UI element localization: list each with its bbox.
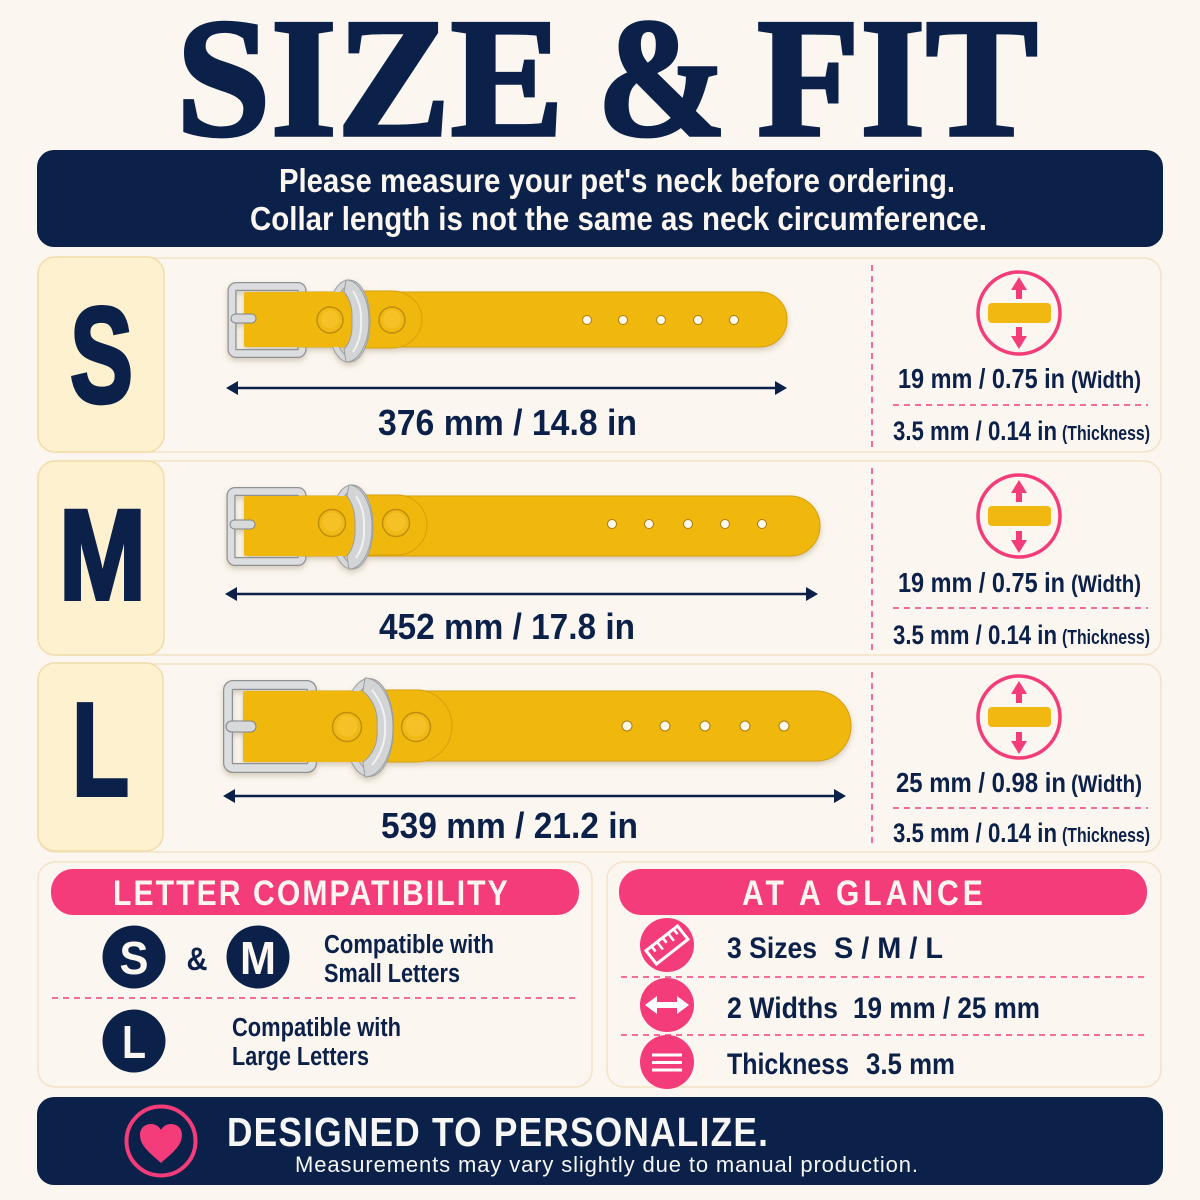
size tab S bbox=[38, 257, 164, 452]
intro banner bbox=[37, 150, 1163, 247]
collar M bbox=[230, 485, 820, 569]
icon: heart bbox=[126, 1106, 196, 1176]
width L: (Width) bbox=[1071, 771, 1142, 798]
intro banner: Collar length is not the same as neck circumference. bbox=[250, 200, 987, 237]
sizes row bbox=[727, 932, 943, 965]
letter compatibility heading: LETTER COMPATIBILITY bbox=[113, 873, 508, 913]
thickness S: 3.5 mm / 0.14 in bbox=[893, 416, 1057, 446]
collar S bbox=[231, 280, 787, 362]
thickness M: 3.5 mm / 0.14 in bbox=[893, 620, 1057, 650]
width icon L bbox=[978, 676, 1060, 758]
icon: width arrows bbox=[640, 978, 694, 1032]
large letters text: Large Letters bbox=[232, 1043, 369, 1071]
badge L bbox=[102, 1010, 166, 1072]
footer note: Measurements may vary slightly due to manual production. bbox=[295, 1152, 918, 1177]
length arrow M bbox=[225, 587, 818, 601]
badge S bbox=[102, 926, 166, 988]
size tab M bbox=[38, 461, 164, 655]
small letters text: Small Letters bbox=[324, 960, 460, 988]
width L: 25 mm / 0.98 in bbox=[896, 767, 1066, 798]
intro banner: Please measure your pet's neck before ordering. bbox=[279, 162, 955, 199]
large letters text: Compatible with bbox=[232, 1014, 401, 1042]
small letters text: Compatible with bbox=[324, 931, 494, 959]
thickness M: (Thickness) bbox=[1062, 627, 1150, 649]
thickness L: (Thickness) bbox=[1062, 825, 1150, 847]
badge S: S bbox=[120, 932, 148, 984]
length M: 452 mm / 17.8 in bbox=[379, 606, 635, 647]
sizes row: 3 Sizes bbox=[727, 932, 817, 965]
thickness L: 3.5 mm / 0.14 in bbox=[893, 818, 1057, 848]
panel: size L bbox=[38, 663, 1161, 852]
size tab S: S bbox=[70, 279, 133, 431]
panel: size S bbox=[38, 257, 1161, 452]
badge M bbox=[226, 926, 290, 988]
thickness row: Thickness bbox=[727, 1048, 849, 1081]
letter compatibility heading bbox=[51, 869, 579, 915]
small letters text bbox=[324, 931, 494, 988]
width icon M bbox=[978, 475, 1060, 557]
length arrow S bbox=[226, 381, 787, 395]
title bbox=[176, 0, 1038, 172]
widths row: 2 Widths bbox=[727, 992, 838, 1025]
widths row bbox=[727, 992, 1040, 1025]
ampersand: & bbox=[186, 941, 208, 977]
badge M: M bbox=[240, 932, 276, 984]
length L: 539 mm / 21.2 in bbox=[381, 805, 638, 846]
width M: (Width) bbox=[1071, 571, 1141, 598]
size tab L bbox=[38, 663, 163, 851]
panel: letter compatibility bbox=[38, 862, 592, 1087]
at a glance heading bbox=[619, 869, 1147, 915]
panel: size M bbox=[38, 461, 1161, 655]
footer banner bbox=[37, 1097, 1163, 1185]
sizes row: S / M / L bbox=[834, 932, 943, 965]
size tab L: L bbox=[72, 676, 129, 823]
width icon S bbox=[978, 272, 1060, 354]
thickness row: 3.5 mm bbox=[866, 1048, 955, 1081]
thickness row bbox=[727, 1048, 955, 1081]
length S: 376 mm / 14.8 in bbox=[378, 402, 637, 443]
collar L bbox=[226, 678, 851, 777]
panel: at a glance bbox=[607, 862, 1161, 1089]
width S: 19 mm / 0.75 in bbox=[898, 363, 1065, 394]
icon: thickness lines bbox=[640, 1035, 694, 1089]
at a glance heading: AT A GLANCE bbox=[742, 873, 983, 913]
badge L: L bbox=[122, 1016, 146, 1068]
width M: 19 mm / 0.75 in bbox=[898, 567, 1065, 598]
thickness S: (Thickness) bbox=[1062, 423, 1150, 445]
size tab M: M bbox=[59, 484, 146, 627]
width S: (Width) bbox=[1071, 367, 1141, 394]
footer heading: DESIGNED TO PERSONALIZE. bbox=[227, 1110, 768, 1156]
large letters text bbox=[232, 1014, 401, 1071]
icon: ruler bbox=[640, 918, 694, 972]
length arrow L bbox=[223, 789, 846, 803]
widths row: 19 mm / 25 mm bbox=[853, 992, 1040, 1025]
